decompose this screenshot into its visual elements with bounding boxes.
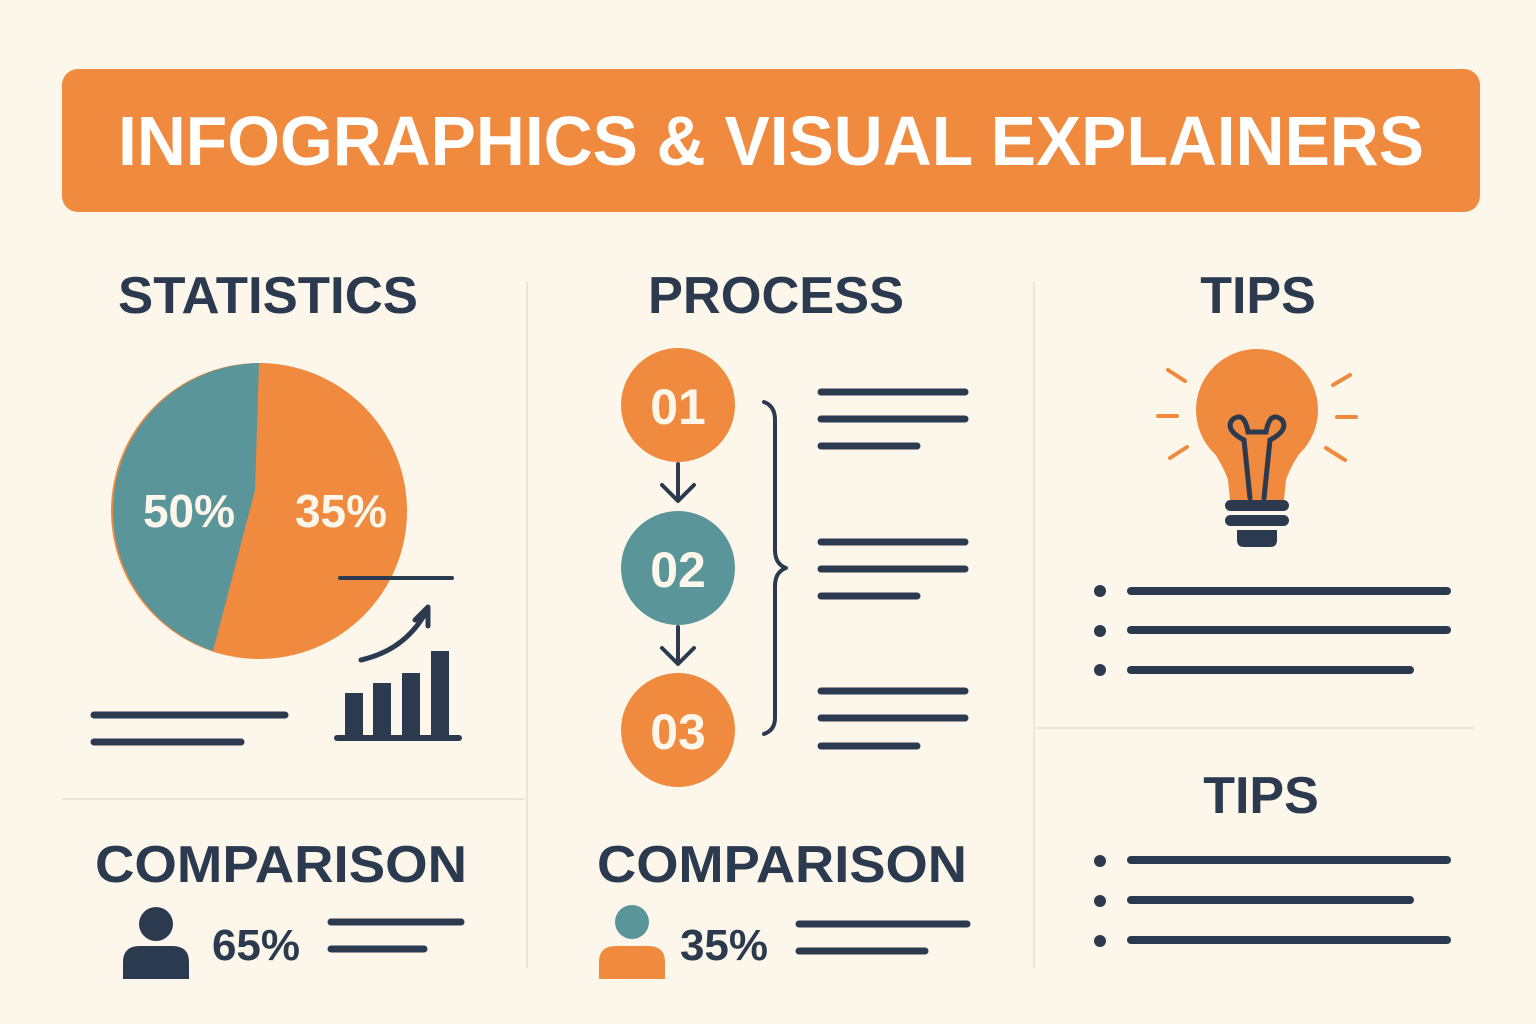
comparison 1: person icon 65%: 65% bbox=[212, 921, 300, 970]
text lines: statistics bbox=[94, 715, 285, 742]
heading: process: PROCESS bbox=[648, 267, 904, 325]
tips list 2 bbox=[1094, 855, 1447, 947]
comparison 2: person icon 35% bbox=[599, 905, 967, 979]
heading: comparison 2: COMPARISON bbox=[597, 836, 967, 894]
pie chart bbox=[111, 363, 407, 659]
heading: statistics: STATISTICS bbox=[118, 267, 418, 325]
title banner: INFOGRAPHICS & VISUAL EXPLAINERS bbox=[118, 102, 1424, 180]
comparison 2: person icon 35%: 35% bbox=[680, 921, 768, 970]
bar chart icon with arrow bbox=[334, 607, 462, 741]
process text lines bbox=[821, 392, 965, 746]
pie chart: 35% bbox=[295, 485, 387, 537]
process steps: 01 bbox=[650, 379, 706, 435]
process steps: 02 bbox=[650, 542, 706, 598]
heading: tips 2: TIPS bbox=[1203, 767, 1319, 825]
pie chart: 50% bbox=[143, 485, 235, 537]
comparison 1: person icon 65% bbox=[123, 907, 461, 979]
heading: comparison 1: COMPARISON bbox=[95, 836, 467, 894]
tips list 1 bbox=[1094, 585, 1447, 676]
process steps bbox=[621, 348, 786, 787]
heading: tips: TIPS bbox=[1200, 267, 1316, 325]
title banner bbox=[62, 69, 1480, 212]
icon: lightbulb bbox=[1158, 349, 1356, 547]
process steps: 03 bbox=[650, 704, 706, 760]
